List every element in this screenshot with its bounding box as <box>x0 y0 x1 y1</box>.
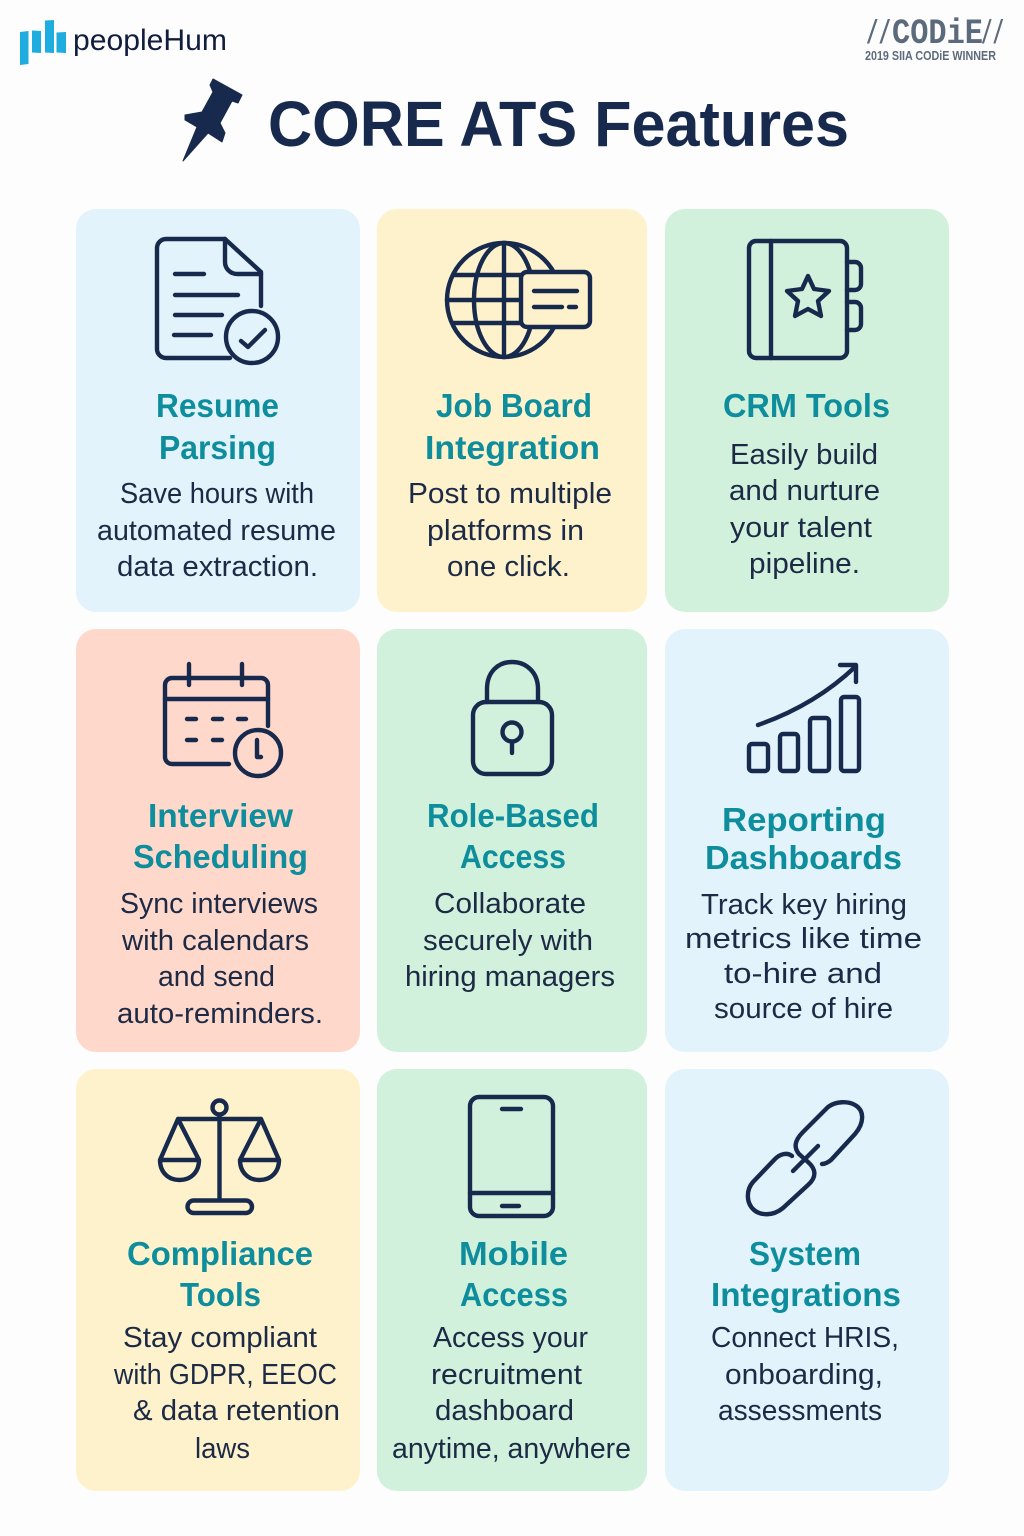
icon: padlock <box>473 662 552 774</box>
heading: Compliance Tools: Compliance <box>127 1235 313 1272</box>
text: Job Board description: one click. <box>447 551 570 583</box>
heading: Role-Based Access: Access <box>460 838 566 875</box>
text: Mobile Access description: anytime, anywhere <box>392 1433 631 1465</box>
text: Mobile Access description: Access your <box>433 1322 588 1354</box>
text: Compliance Tools description: & data retention <box>133 1395 340 1427</box>
text: System Integrations description <box>711 1322 899 1427</box>
text: Interview Scheduling description <box>117 888 323 1030</box>
heading: Role-Based Access <box>427 797 599 875</box>
logo: peopleHum <box>20 20 227 65</box>
text: System Integrations description: Connect HRIS, <box>711 1322 899 1354</box>
text: CRM Tools description: and nurture <box>729 475 880 507</box>
logo: CODiE award: // <box>866 16 891 53</box>
heading: Job Board Integration <box>425 387 600 466</box>
text: Resume Parsing description: data extraction. <box>117 551 318 583</box>
text: Reporting Dashboards description: metrics like time <box>685 923 922 955</box>
text: Interview Scheduling description: Sync interviews <box>120 888 318 920</box>
title: CORE ATS Features <box>268 88 849 160</box>
panel: CRM Tools <box>665 209 949 612</box>
heading: Compliance Tools: Tools <box>180 1276 261 1313</box>
text: Resume Parsing description: automated resume <box>97 515 336 547</box>
icon: pushpin <box>183 79 242 161</box>
text: CRM Tools description: your talent <box>730 512 872 544</box>
heading: Reporting Dashboards <box>705 801 902 876</box>
logo: CODiE award: // <box>981 16 1004 53</box>
text: Interview Scheduling description: and send <box>158 961 275 993</box>
panel: System Integrations <box>665 1069 949 1491</box>
panel: Compliance Tools <box>76 1069 360 1491</box>
text: Reporting Dashboards description <box>685 889 922 1025</box>
heading: Reporting Dashboards: Reporting <box>722 801 886 838</box>
text: Job Board description <box>408 478 612 583</box>
icon: globe with card <box>447 243 590 357</box>
logo: CODiE award: CODiE <box>892 14 983 54</box>
icon: address book with star <box>749 241 861 358</box>
panel: Job Board Integration <box>377 209 647 612</box>
heading: Interview Scheduling <box>133 797 308 875</box>
icon: smartphone <box>470 1097 553 1216</box>
panel: Mobile Access <box>377 1069 647 1491</box>
text: Mobile Access description: dashboard <box>435 1395 574 1427</box>
text: Job Board description: Post to multiple <box>408 478 612 510</box>
text: System Integrations description: onboarding, <box>725 1359 883 1391</box>
text: CRM Tools description: pipeline. <box>749 548 860 580</box>
text: Mobile Access description <box>392 1322 631 1465</box>
heading: System Integrations: Integrations <box>711 1276 901 1313</box>
text: Interview Scheduling description: auto-reminders. <box>117 998 323 1030</box>
text: Job Board description: platforms in <box>427 515 584 547</box>
text: CRM Tools description <box>729 439 880 580</box>
heading: Mobile Access: Mobile <box>459 1235 568 1272</box>
heading: System Integrations <box>711 1235 901 1313</box>
text: Reporting Dashboards description: source of hire <box>714 993 893 1025</box>
text: Role-Based Access description: Collaborate <box>434 888 586 920</box>
logo: CODiE award: 2019 SIIA CODiE WINNER <box>865 49 996 63</box>
text: CRM Tools description: Easily build <box>730 439 878 471</box>
text: System Integrations description: assessments <box>718 1395 882 1427</box>
text: Role-Based Access description: securely with <box>423 925 593 957</box>
text: Compliance Tools description: Stay compliant <box>123 1322 317 1354</box>
heading: Resume Parsing: Parsing <box>159 429 276 466</box>
panel: Interview Scheduling <box>76 629 360 1052</box>
heading: Job Board Integration: Job Board <box>436 387 592 424</box>
logo: CODiE award <box>865 14 1004 63</box>
text: Reporting Dashboards description: Track key hiring <box>701 889 907 921</box>
heading: Resume Parsing: Resume <box>156 387 279 424</box>
heading: Interview Scheduling: Interview <box>148 797 293 834</box>
panel: Role-Based Access <box>377 629 647 1052</box>
heading: CRM Tools: CRM Tools <box>723 387 890 424</box>
text: Role-Based Access description: hiring managers <box>405 961 615 993</box>
heading: Job Board Integration: Integration <box>425 429 600 466</box>
icon: calendar with clock <box>165 664 281 776</box>
text: Reporting Dashboards description: to-hire and <box>724 958 882 990</box>
heading: Reporting Dashboards: Dashboards <box>705 839 902 876</box>
heading: Compliance Tools <box>127 1235 313 1313</box>
logo: peopleHum: peopleHum <box>73 24 227 57</box>
text: Role-Based Access description <box>405 888 615 993</box>
panel: Reporting Dashboards <box>665 629 949 1052</box>
text: Resume Parsing description: Save hours with <box>120 478 314 510</box>
icon: chain link <box>748 1102 862 1214</box>
text: Compliance Tools description: laws <box>195 1433 250 1465</box>
text: Mobile Access description: recruitment <box>431 1359 582 1391</box>
icon: rising bar chart <box>749 665 859 771</box>
text: Interview Scheduling description: with calendars <box>121 925 309 957</box>
icon: document with check <box>157 239 278 363</box>
heading: System Integrations: System <box>749 1235 861 1272</box>
heading: Interview Scheduling: Scheduling <box>133 838 308 875</box>
heading: Mobile Access <box>459 1235 568 1313</box>
text: Compliance Tools description: with GDPR, EEOC <box>113 1359 337 1391</box>
heading: Resume Parsing <box>156 387 279 466</box>
heading: Mobile Access: Access <box>460 1276 568 1313</box>
text: Compliance Tools description <box>113 1322 340 1465</box>
heading: Role-Based Access: Role-Based <box>427 797 599 834</box>
icon: balance scales <box>160 1100 279 1213</box>
text: Resume Parsing description <box>97 478 336 583</box>
panel: Resume Parsing <box>76 209 360 612</box>
